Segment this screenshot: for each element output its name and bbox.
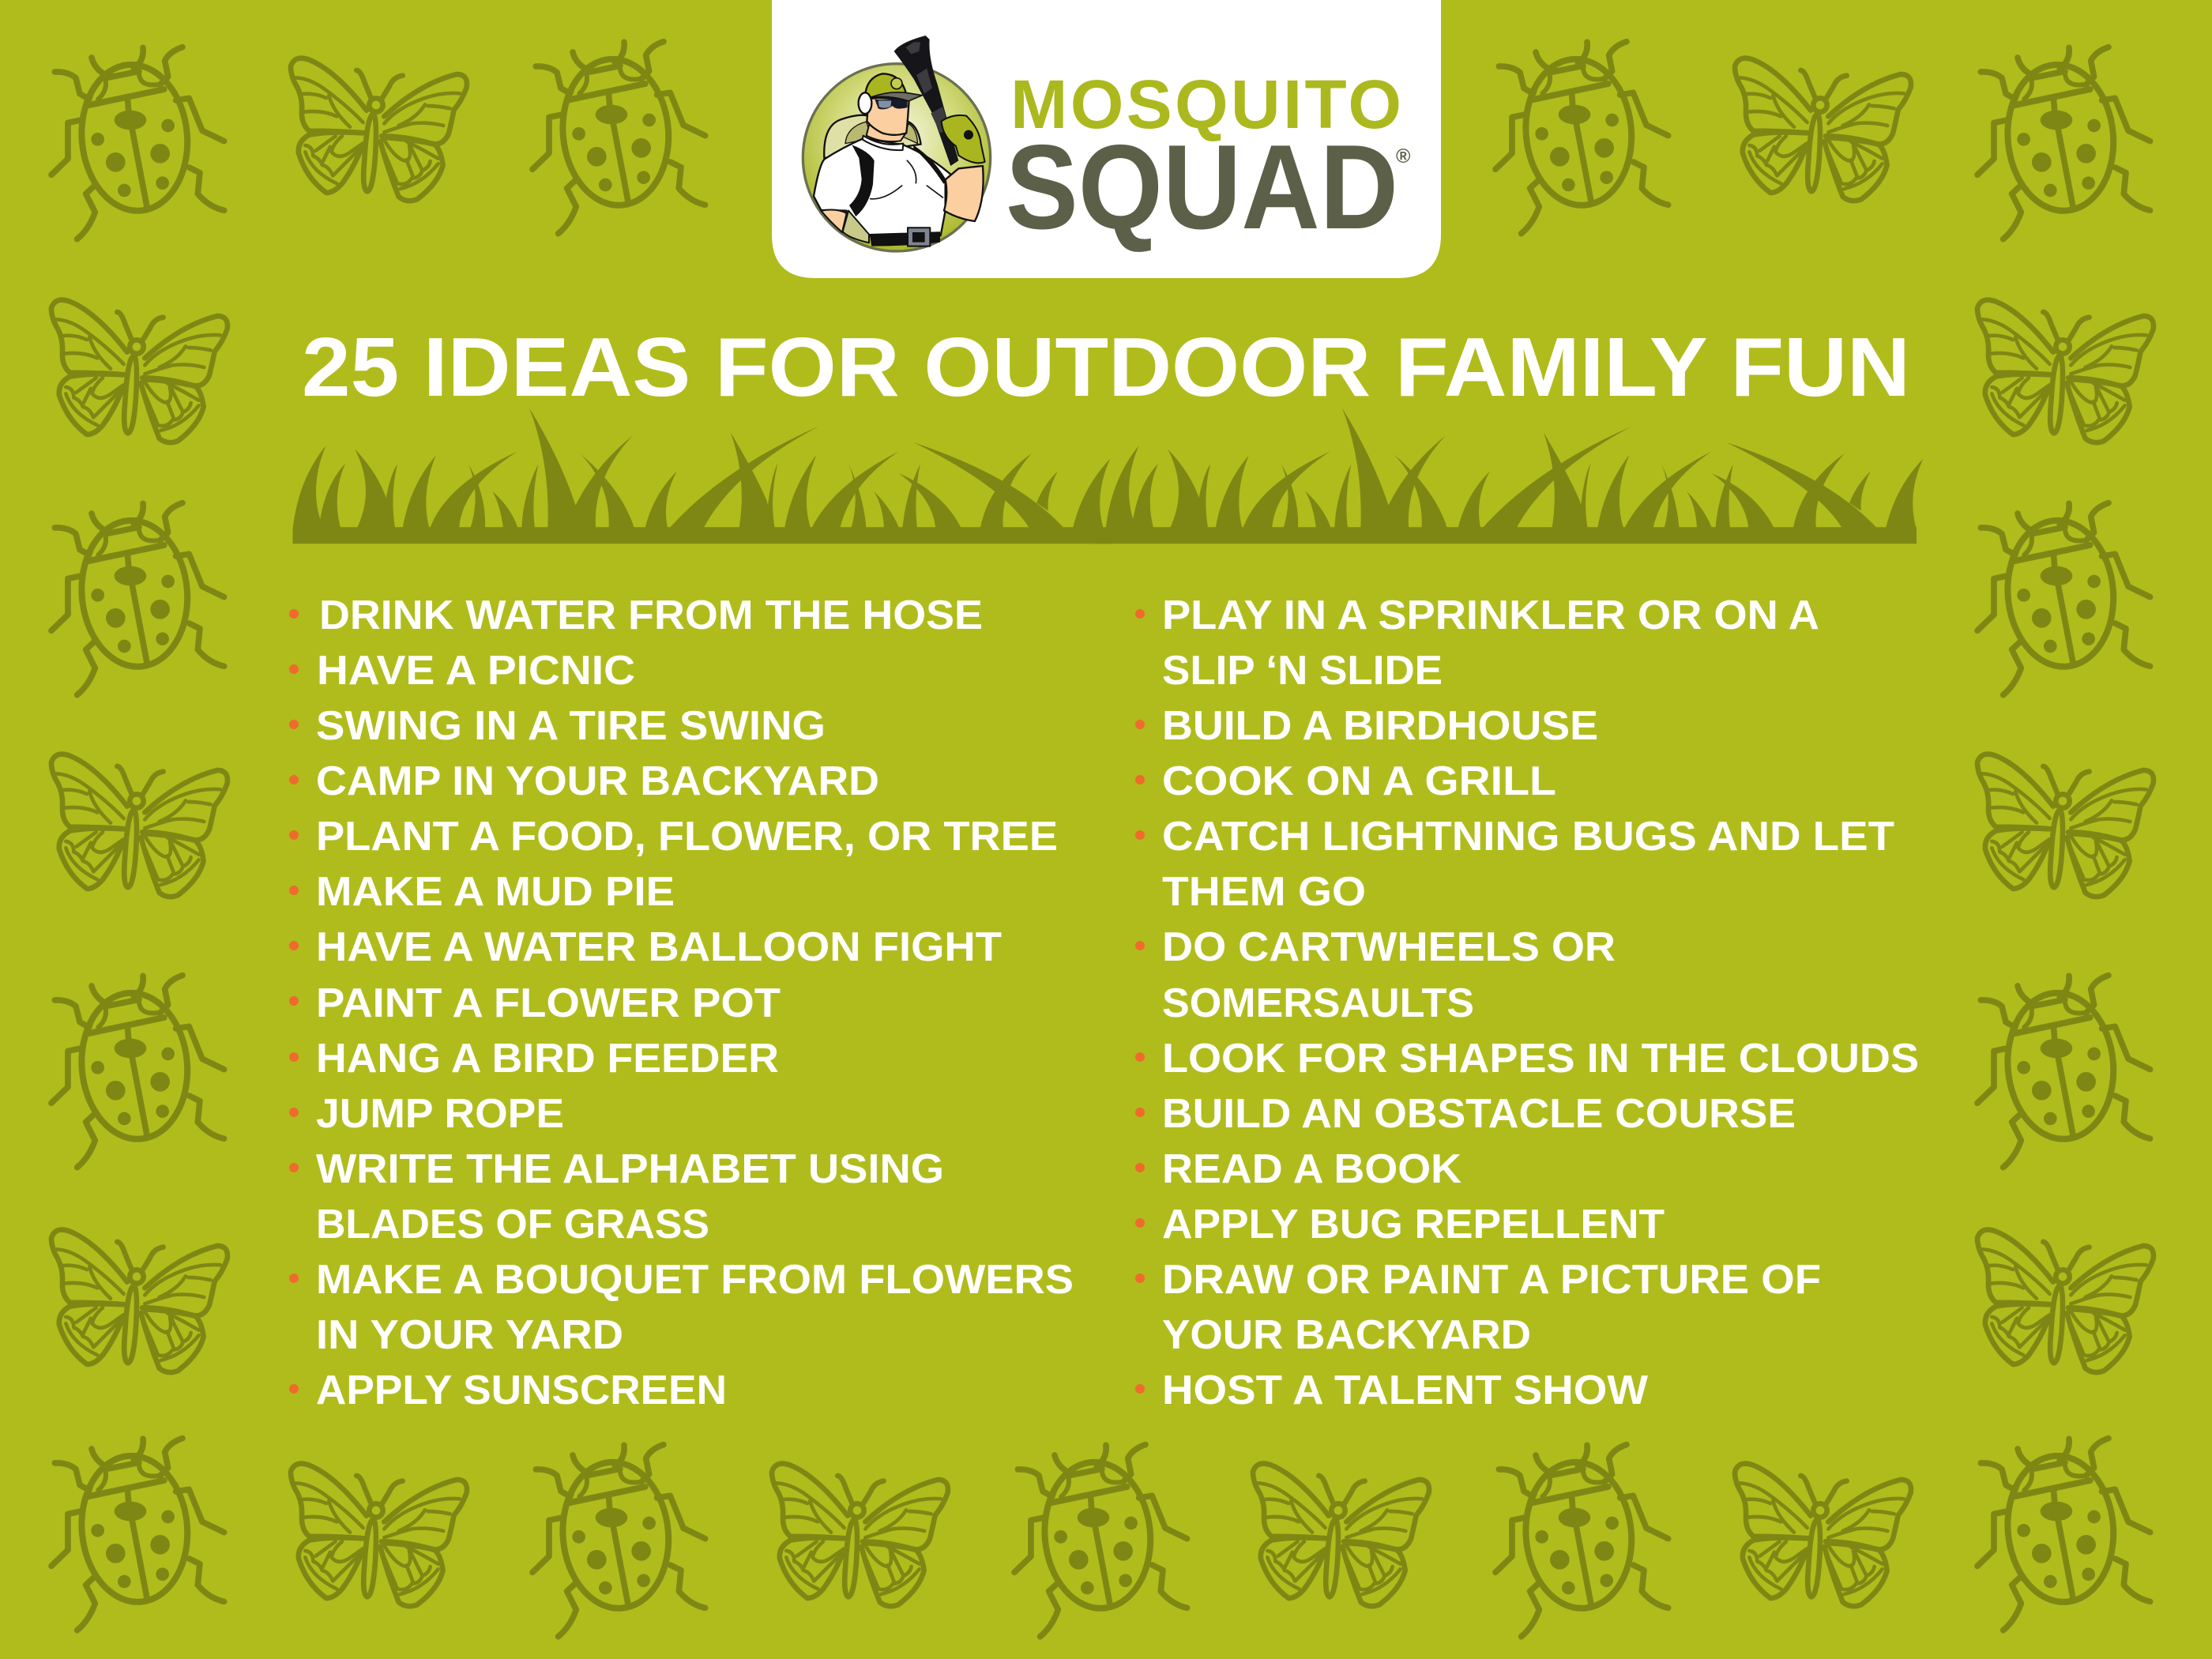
icon: butterfly: [1253, 1464, 1429, 1606]
icon: ladybug: [1977, 47, 2150, 239]
title: 25 IDEAS FOR OUTDOOR FAMILY FUN: [302, 321, 1910, 414]
icon: butterfly: [291, 1464, 467, 1606]
list item: PLANT A FOOD, FLOWER, OR TREE: [316, 814, 1058, 860]
icon: butterfly: [51, 1230, 228, 1372]
list item: MAKE A BOUQUET FROM FLOWERS: [316, 1257, 1074, 1303]
list item: READ A BOOK: [1162, 1146, 1462, 1192]
list item: HAVE A PICNIC: [317, 648, 635, 694]
logo panel: [772, 0, 1441, 278]
icon: butterfly: [1977, 754, 2154, 897]
icon: butterfly: [51, 300, 228, 442]
list item: COOK ON A GRILL: [1162, 758, 1556, 804]
list item: DRINK WATER FROM THE HOSE: [319, 592, 983, 638]
list item: SWING IN A TIRE SWING: [316, 703, 826, 749]
list item: CATCH LIGHTNING BUGS AND LET: [1162, 814, 1894, 860]
icon: ladybug: [1495, 42, 1668, 234]
list item: DO CARTWHEELS OR: [1162, 924, 1616, 970]
logo mascot: [803, 36, 991, 251]
icon: ladybug: [51, 47, 224, 239]
list: right column: [1135, 592, 1919, 1413]
wordmark: Squad: SQUAD: [1006, 120, 1398, 254]
icon: ladybug: [51, 1439, 224, 1631]
icon: butterfly: [1977, 1230, 2154, 1372]
list item: BUILD AN OBSTACLE COURSE: [1162, 1091, 1796, 1137]
list item: HAVE A WATER BALLOON FIGHT: [316, 924, 1002, 970]
list item: CAMP IN YOUR BACKYARD: [316, 758, 879, 804]
icon: ladybug: [51, 503, 224, 695]
list item: MAKE A MUD PIE: [316, 869, 675, 915]
icon: butterfly: [1735, 1464, 1911, 1606]
list item: [1135, 814, 1894, 915]
list item: [1135, 924, 1616, 1026]
icon: ladybug: [1495, 1445, 1668, 1637]
icon: ladybug: [532, 1445, 705, 1637]
icon: ladybug: [1977, 503, 2150, 695]
list item: [1135, 592, 1819, 694]
list item: JUMP ROPE: [316, 1091, 564, 1137]
registered mark: ®: [1396, 145, 1411, 167]
wordmark: Mosquito: MOSQUITO: [1010, 66, 1401, 143]
icon: butterfly: [1735, 58, 1911, 201]
list item: HANG A BIRD FEEDER: [316, 1036, 779, 1082]
icon: ladybug: [1014, 1445, 1187, 1637]
list item: [1135, 1257, 1821, 1358]
list item: IN YOUR YARD: [316, 1312, 623, 1358]
list item: APPLY BUG REPELLENT: [1162, 1202, 1665, 1247]
icon: butterfly: [51, 754, 228, 897]
list item: BUILD A BIRDHOUSE: [1162, 703, 1598, 749]
icon: butterfly: [1977, 300, 2154, 442]
list item: [289, 1257, 1074, 1358]
list item: WRITE THE ALPHABET USING: [316, 1146, 944, 1192]
list item: PLAY IN A SPRINKLER OR ON A: [1162, 592, 1819, 638]
list item: HOST A TALENT SHOW: [1162, 1367, 1649, 1413]
list item: PAINT A FLOWER POT: [316, 980, 781, 1026]
icon: ladybug: [1977, 1439, 2150, 1631]
list item: BLADES OF GRASS: [316, 1202, 709, 1247]
icon: ladybug: [51, 976, 224, 1168]
list item: [289, 1146, 944, 1247]
icon: butterfly: [772, 1464, 948, 1606]
list item: SOMERSAULTS: [1162, 980, 1474, 1026]
grass divider: [293, 408, 1923, 544]
list item: YOUR BACKYARD: [1162, 1312, 1531, 1358]
icon: ladybug: [532, 42, 705, 234]
list item: APPLY SUNSCREEN: [316, 1367, 727, 1413]
list item: DRAW OR PAINT A PICTURE OF: [1162, 1257, 1821, 1303]
list item: LOOK FOR SHAPES IN THE CLOUDS: [1162, 1036, 1919, 1082]
icon: ladybug: [1977, 976, 2150, 1168]
list item: THEM GO: [1162, 869, 1366, 915]
list item: SLIP ‘N SLIDE: [1162, 648, 1443, 694]
icon: butterfly: [291, 58, 467, 201]
list: left column: [289, 592, 1074, 1413]
